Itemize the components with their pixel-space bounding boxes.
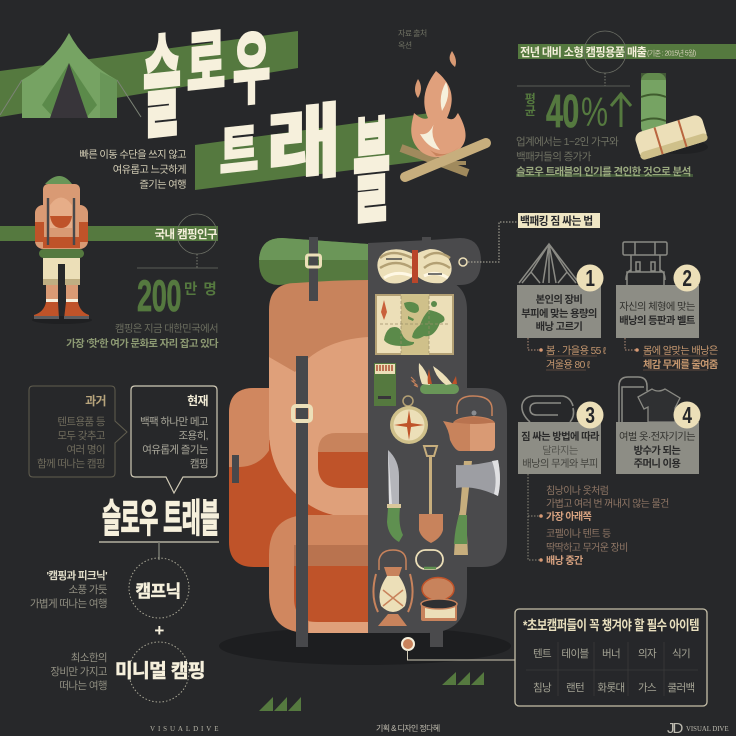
footer: logo: [667, 720, 729, 736]
step 1: 1: [585, 267, 595, 292]
title subtitle: [79, 149, 186, 191]
step 2: [616, 242, 718, 371]
plus: +: [154, 621, 164, 640]
step 4: 여벌 옷·전자기기는: [619, 431, 695, 443]
item: carabiner: [416, 550, 443, 569]
step 3: 짐 싸는 방법에 따라: [521, 430, 600, 443]
footer: logo: VISUAL DIVE: [686, 726, 729, 733]
triangles left: [259, 697, 301, 711]
campnic: '캠핑과 피크닉': [47, 569, 107, 582]
item: axe: [454, 460, 500, 555]
source: 자료 출처: [398, 28, 427, 38]
callout: past: 함께 떠나는 캠핑: [37, 458, 105, 470]
sales description: 슬로우 트래블의 인기를 견인한 것으로 분석: [516, 165, 691, 178]
step 3: 3: [585, 404, 595, 429]
title subtitle: 즐기는 여행: [139, 179, 186, 191]
callout: past: 텐트용품 등: [57, 416, 106, 428]
icon: tent: [0, 33, 141, 118]
step 3: 배낭의 무게와 부피: [522, 458, 598, 470]
campnic: 가볍게 떠나는 여행: [30, 598, 107, 610]
essential items table: 쿨러백: [667, 682, 695, 694]
title subtitle: 여유롭고 느긋하게: [113, 163, 186, 176]
item: matchbox: [374, 363, 396, 406]
essential items table: 버너: [602, 648, 620, 660]
item: kettle: [443, 396, 495, 451]
essential items table: 침낭: [533, 682, 552, 694]
title: 슬로우 트래블: 블: [353, 108, 390, 238]
step 3: 배낭 중간: [546, 554, 583, 567]
callout: present: 현재: [187, 393, 209, 408]
minimal camping: 장비만 가지고: [50, 666, 108, 678]
item: lantern: [373, 550, 413, 626]
essential items table: 랜턴: [566, 682, 584, 694]
title: 슬로우 트래블: 슬: [143, 25, 180, 152]
essential items table: [515, 609, 707, 706]
camping population header: [0, 214, 218, 268]
step 3: 달라지는: [542, 445, 578, 457]
minimal camping: 떠나는 여행: [59, 680, 107, 692]
step 1: 본인의 장비: [536, 293, 582, 306]
step 3: 딱딱하고 무거운 장비: [546, 541, 628, 554]
title stripe bottom: [195, 113, 430, 190]
packing header: 백패킹 짐 싸는 법: [520, 214, 593, 228]
step 1: [517, 244, 607, 371]
population description: 가장 '핫'한 여가 문화로 자리 잡고 있다: [66, 337, 219, 350]
step 4: 주머니 이용: [634, 457, 681, 470]
callout: present: 여유롭게 즐기는: [142, 444, 209, 456]
essential items table: 화롯대: [597, 682, 625, 694]
ground shadow: [219, 627, 511, 665]
title: 슬로우 트래블: [143, 23, 390, 238]
stat: 200만 명: 만 명: [184, 281, 218, 298]
callout: past: 과거: [85, 393, 106, 408]
grommet and dotted connector: [459, 222, 519, 266]
callout: present: 백팩 하나만 메고: [140, 415, 209, 428]
heading: 슬로우 트래블: 슬로우 트래블: [102, 498, 219, 541]
step 3: 가볍고 여러 번 꺼내지 않는 물건: [546, 498, 669, 510]
essential items table: 의자: [638, 648, 657, 660]
step 4: 4: [682, 404, 693, 429]
backpack: right half: [368, 237, 507, 647]
title: 슬로우 트래블: 로: [187, 23, 224, 106]
campnic: 소풍 가듯: [68, 584, 108, 596]
item: knife: [387, 450, 403, 542]
step 4: [616, 377, 700, 474]
connector to item table: [402, 638, 515, 660]
step 3: [518, 396, 669, 567]
backpack: left half: [229, 238, 368, 633]
minimal camping: [50, 642, 205, 702]
sales header: (기준 : 2015년 5월): [647, 48, 696, 58]
step 2: 자신의 체형에 맞는: [619, 301, 695, 313]
sales description: 업계에서는 1~2인 가구와: [516, 135, 619, 148]
item: shovel: [419, 446, 443, 543]
essential items table: *초보캠퍼들이 꼭 챙겨야 할 필수 아이템: [523, 618, 699, 633]
backpack: straps and buckles: [232, 237, 320, 647]
sales header: [517, 31, 736, 86]
essential items table: 텐트: [533, 648, 552, 660]
step 3: 침낭이나 옷처럼: [546, 484, 608, 497]
step 1: 배낭 고르기: [536, 320, 582, 333]
step 3: 코펠이나 텐트 등: [546, 528, 611, 540]
heading: 슬로우 트래블: [99, 498, 219, 560]
item: swiss army knife: [411, 363, 459, 394]
callout: present: 조용히,: [178, 430, 208, 442]
campnic: 캠프닉: [135, 582, 181, 601]
callout: past: [29, 386, 127, 477]
population description: 캠핑은 지금 대한민국에서: [115, 323, 218, 335]
stat: 40%: 평: [525, 92, 535, 106]
item: compass: [390, 396, 428, 444]
campnic: [30, 558, 189, 618]
source: [398, 28, 427, 50]
item: map: [375, 294, 454, 355]
triangles right: [442, 672, 484, 685]
minimal camping: 미니멀 캠핑: [115, 660, 205, 682]
callout: present: [131, 386, 217, 493]
population description: [66, 323, 219, 350]
step 1: 겨울용 80 ℓ: [546, 359, 591, 371]
callout: past: 여러 명이: [66, 444, 105, 456]
source: 옥션: [398, 40, 412, 50]
step 2: 2: [682, 267, 692, 292]
callout: present: 캠핑: [190, 458, 208, 470]
title stripe top: [0, 31, 298, 117]
stat: 40%: [525, 85, 631, 138]
title: 슬로우 트래블: 트: [220, 119, 257, 186]
step 3: 가장 아래쪽: [546, 510, 592, 523]
stat: 40%: 균: [525, 104, 536, 118]
title: 슬로우 트래블: 우: [233, 25, 270, 116]
icon: sleeping bags: [633, 73, 709, 161]
footer: credits: 기획 & 디자인 정다혜: [376, 723, 440, 733]
step 2: 배낭의 등판과 벨트: [619, 314, 696, 327]
step 2: 몸에 알맞는 배낭은: [643, 345, 718, 357]
step 4: 방수가 되는: [634, 444, 681, 457]
callout: past: 모두 갖추고: [57, 430, 106, 442]
stat: 200만 명: 200: [137, 270, 181, 321]
title: 슬로우 트래블: 래: [267, 97, 340, 194]
step 1: 부피에 맞는 용량의: [521, 307, 597, 320]
sales description: 백패커들의 증가가: [516, 151, 592, 163]
essential items table: 식기: [672, 648, 690, 660]
minimal camping: 최소한의: [71, 652, 107, 664]
item: rope: [377, 249, 452, 283]
item: canned food: [421, 578, 457, 621]
stat: 40%: 40: [546, 85, 579, 138]
icon: hiker: [32, 176, 92, 324]
title subtitle: 빠른 이동 수단을 쓰지 않고: [79, 149, 186, 161]
icon: campfire: [401, 51, 486, 177]
sales description: [516, 135, 693, 178]
stat: 40%: %: [581, 89, 608, 135]
step 1: 봄 · 가을용 55 ℓ: [546, 345, 607, 357]
step 2: 체감 무게를 줄여줌: [643, 358, 718, 371]
stat: 200만 명: [137, 270, 218, 321]
sales header: 전년 대비 소형 캠핑용품 매출: [520, 45, 647, 59]
essential items table: 가스: [638, 682, 657, 694]
essential items table: 테이블: [561, 648, 590, 660]
footer: visual dive: VISUALDIVE: [150, 725, 221, 733]
camping population header: 국내 캠핑인구: [155, 227, 218, 241]
